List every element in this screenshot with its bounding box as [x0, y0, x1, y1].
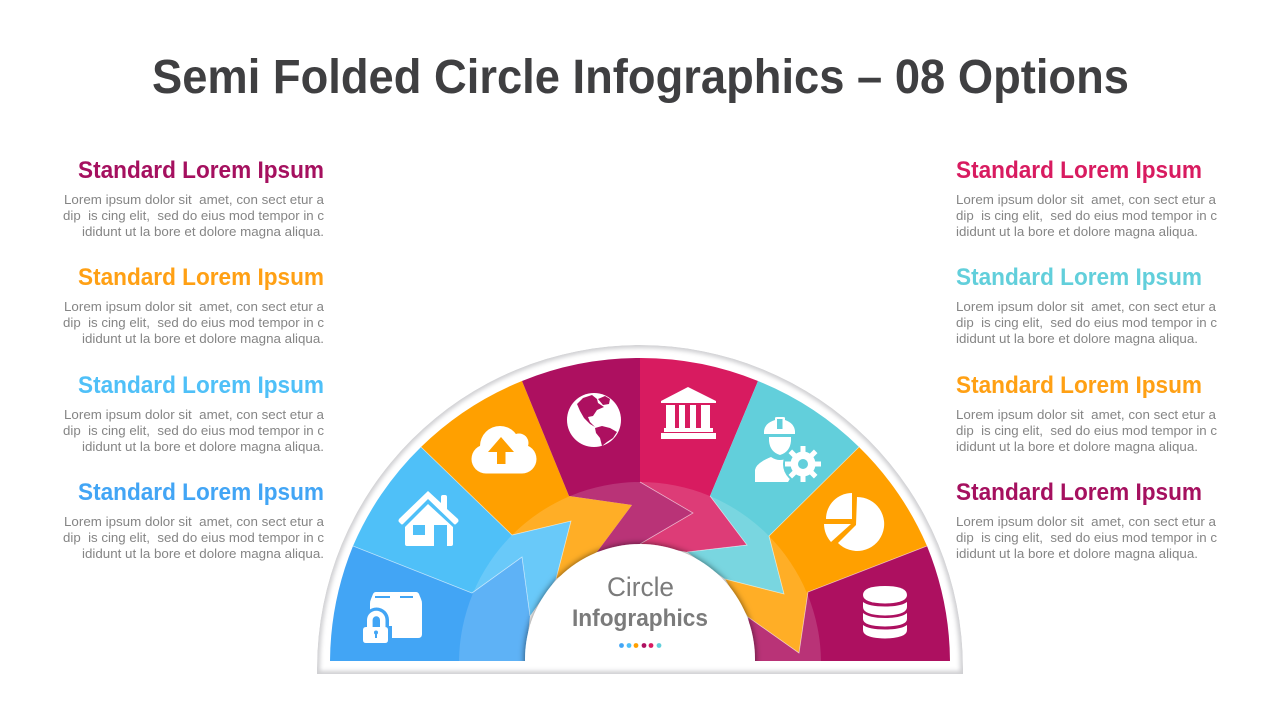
right text block 2 [956, 264, 1217, 346]
fold highlight lines [353, 447, 927, 653]
segment 7: orange [725, 447, 927, 653]
semicircle plate [317, 345, 963, 674]
left text block 2: Standard Lorem Ipsum [78, 264, 324, 291]
segment 8: purple [748, 546, 950, 661]
right text block 3: Standard Lorem Ipsum [956, 372, 1202, 399]
left text block 2: ididunt ut la bore et dolore magna aliqua. [82, 331, 324, 346]
icon: house [398, 491, 458, 546]
left text block 1: dip is cing elit, sed do eius mod tempor in c [63, 208, 324, 223]
icon: box with lock [360, 592, 422, 646]
folded semicircle chart [330, 358, 950, 661]
infographic canvas [64, 58, 1217, 674]
right text block 3: ididunt ut la bore et dolore magna aliqua. [956, 439, 1198, 454]
centre hub [520, 539, 760, 661]
right text block 4: Lorem ipsum dolor sit amet, con sect etur a [956, 514, 1217, 529]
left text block 3: Standard Lorem Ipsum [78, 372, 324, 399]
centre label: Circle [607, 572, 674, 602]
segment 4: purple [522, 358, 693, 552]
segment 5: pink [640, 358, 758, 552]
left text block 2: dip is cing elit, sed do eius mod tempor in c [63, 315, 324, 330]
left text block 4: dip is cing elit, sed do eius mod tempor in c [63, 530, 324, 545]
left text block 1 [63, 157, 325, 239]
icon: globe [567, 393, 621, 447]
left text block 3: ididunt ut la bore et dolore magna aliqua. [82, 439, 324, 454]
right text block 1 [956, 157, 1217, 239]
right text block 1: Standard Lorem Ipsum [956, 157, 1202, 184]
left text block 1: Standard Lorem Ipsum [78, 157, 324, 184]
icon: worker with gear [755, 417, 823, 484]
segment 1: blue [330, 546, 530, 661]
right text block 1: dip is cing elit, sed do eius mod tempor in c [956, 208, 1217, 223]
right text block 2: dip is cing elit, sed do eius mod tempor in c [956, 315, 1217, 330]
right text block 4 [956, 479, 1217, 561]
right text block 2: Standard Lorem Ipsum [956, 264, 1202, 291]
right text block 4: Standard Lorem Ipsum [956, 479, 1202, 506]
left text block 4 [63, 479, 325, 561]
right text block 2: Lorem ipsum dolor sit amet, con sect etur a [956, 299, 1217, 314]
left text block 4: Standard Lorem Ipsum [78, 479, 324, 506]
left text block 4: ididunt ut la bore et dolore magna aliqua. [82, 546, 324, 561]
icon: pie chart [824, 493, 884, 551]
right text block 1: ididunt ut la bore et dolore magna aliqua. [956, 224, 1198, 239]
left text block 2 [63, 264, 325, 346]
right text block 3: Lorem ipsum dolor sit amet, con sect etur a [956, 407, 1217, 422]
segment 2: light blue [353, 447, 571, 616]
left text block 2: Lorem ipsum dolor sit amet, con sect etur a [64, 299, 325, 314]
left text block 1: ididunt ut la bore et dolore magna aliqua. [82, 224, 324, 239]
right text block 2: ididunt ut la bore et dolore magna aliqua. [956, 331, 1198, 346]
left text block 3 [63, 372, 325, 454]
icon: bank building [661, 387, 716, 439]
right text block 3: dip is cing elit, sed do eius mod tempor in c [956, 423, 1217, 438]
icon: cloud upload [472, 426, 536, 474]
centre label bold: Infographics [572, 605, 708, 632]
left text block 4: Lorem ipsum dolor sit amet, con sect etur a [64, 514, 325, 529]
icon: database [863, 586, 907, 638]
left text block 1: Lorem ipsum dolor sit amet, con sect etur a [64, 192, 325, 207]
segment 6: teal [687, 381, 859, 594]
right text block 3 [956, 372, 1217, 454]
right text block 1: Lorem ipsum dolor sit amet, con sect etur a [956, 192, 1217, 207]
left text block 3: dip is cing elit, sed do eius mod tempor in c [63, 423, 324, 438]
left text block 3: Lorem ipsum dolor sit amet, con sect etur a [64, 407, 325, 422]
translucent fold ring [459, 482, 821, 661]
segment 3: orange [421, 381, 632, 579]
title: Semi Folded Circle Infographics – 08 Options [152, 51, 1129, 104]
right text block 4: dip is cing elit, sed do eius mod tempor in c [956, 530, 1217, 545]
decorative colour dots [619, 643, 661, 648]
gear [783, 444, 823, 484]
right text block 4: ididunt ut la bore et dolore magna aliqua. [956, 546, 1198, 561]
